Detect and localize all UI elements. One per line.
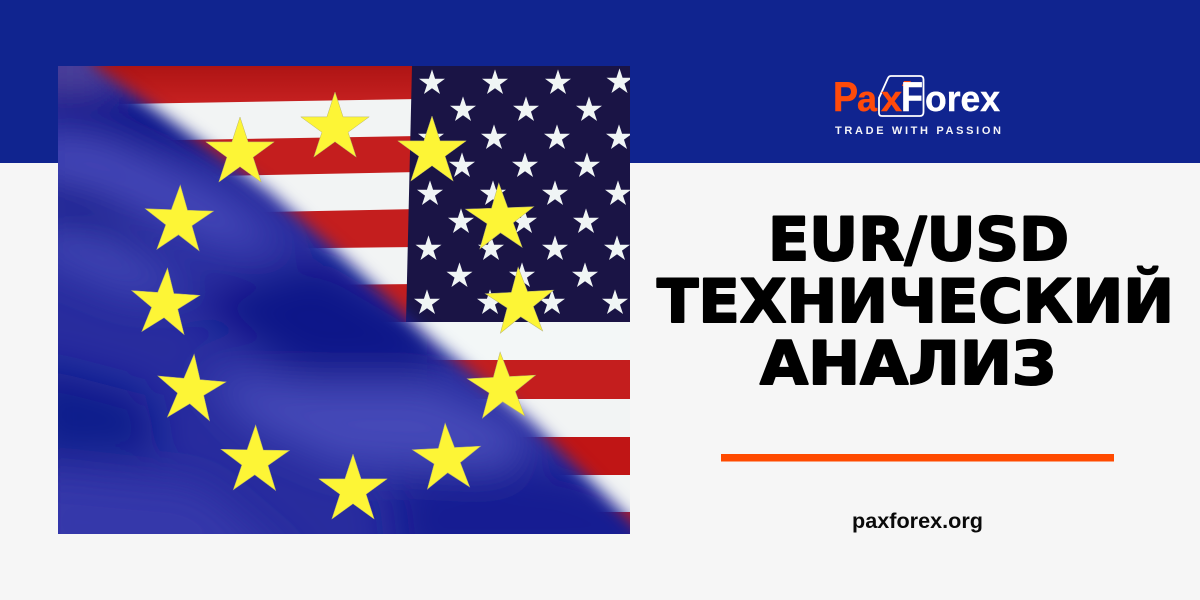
US canton white stars	[414, 68, 632, 314]
logo P: P	[833, 73, 858, 120]
header band	[0, 0, 1200, 163]
logo tagline: TRADE WITH PASSION	[835, 125, 1001, 137]
logo F: F	[901, 73, 923, 120]
logo x: x	[881, 78, 902, 119]
orange divider	[721, 454, 1114, 462]
title	[657, 205, 1174, 399]
logo: PaxForex	[833, 73, 1001, 137]
logo a: a	[857, 78, 878, 119]
title line 1: EUR/USD	[768, 205, 1069, 275]
logo wordmark orex: orex	[925, 78, 1000, 119]
logo box	[879, 76, 924, 116]
title line 3: АНАЛИЗ	[760, 329, 1056, 399]
title line 2: ТЕХНИЧЕСКИЙ	[657, 265, 1174, 337]
EU flag blue field with folds	[58, 66, 630, 534]
US flag stripes	[58, 66, 630, 534]
logo tick	[902, 81, 911, 86]
flag image: EU and US flags blended	[58, 66, 630, 534]
EU flag yellow stars ring	[129, 92, 556, 519]
US flag canton	[406, 66, 630, 322]
website url: paxforex.org	[852, 510, 983, 533]
